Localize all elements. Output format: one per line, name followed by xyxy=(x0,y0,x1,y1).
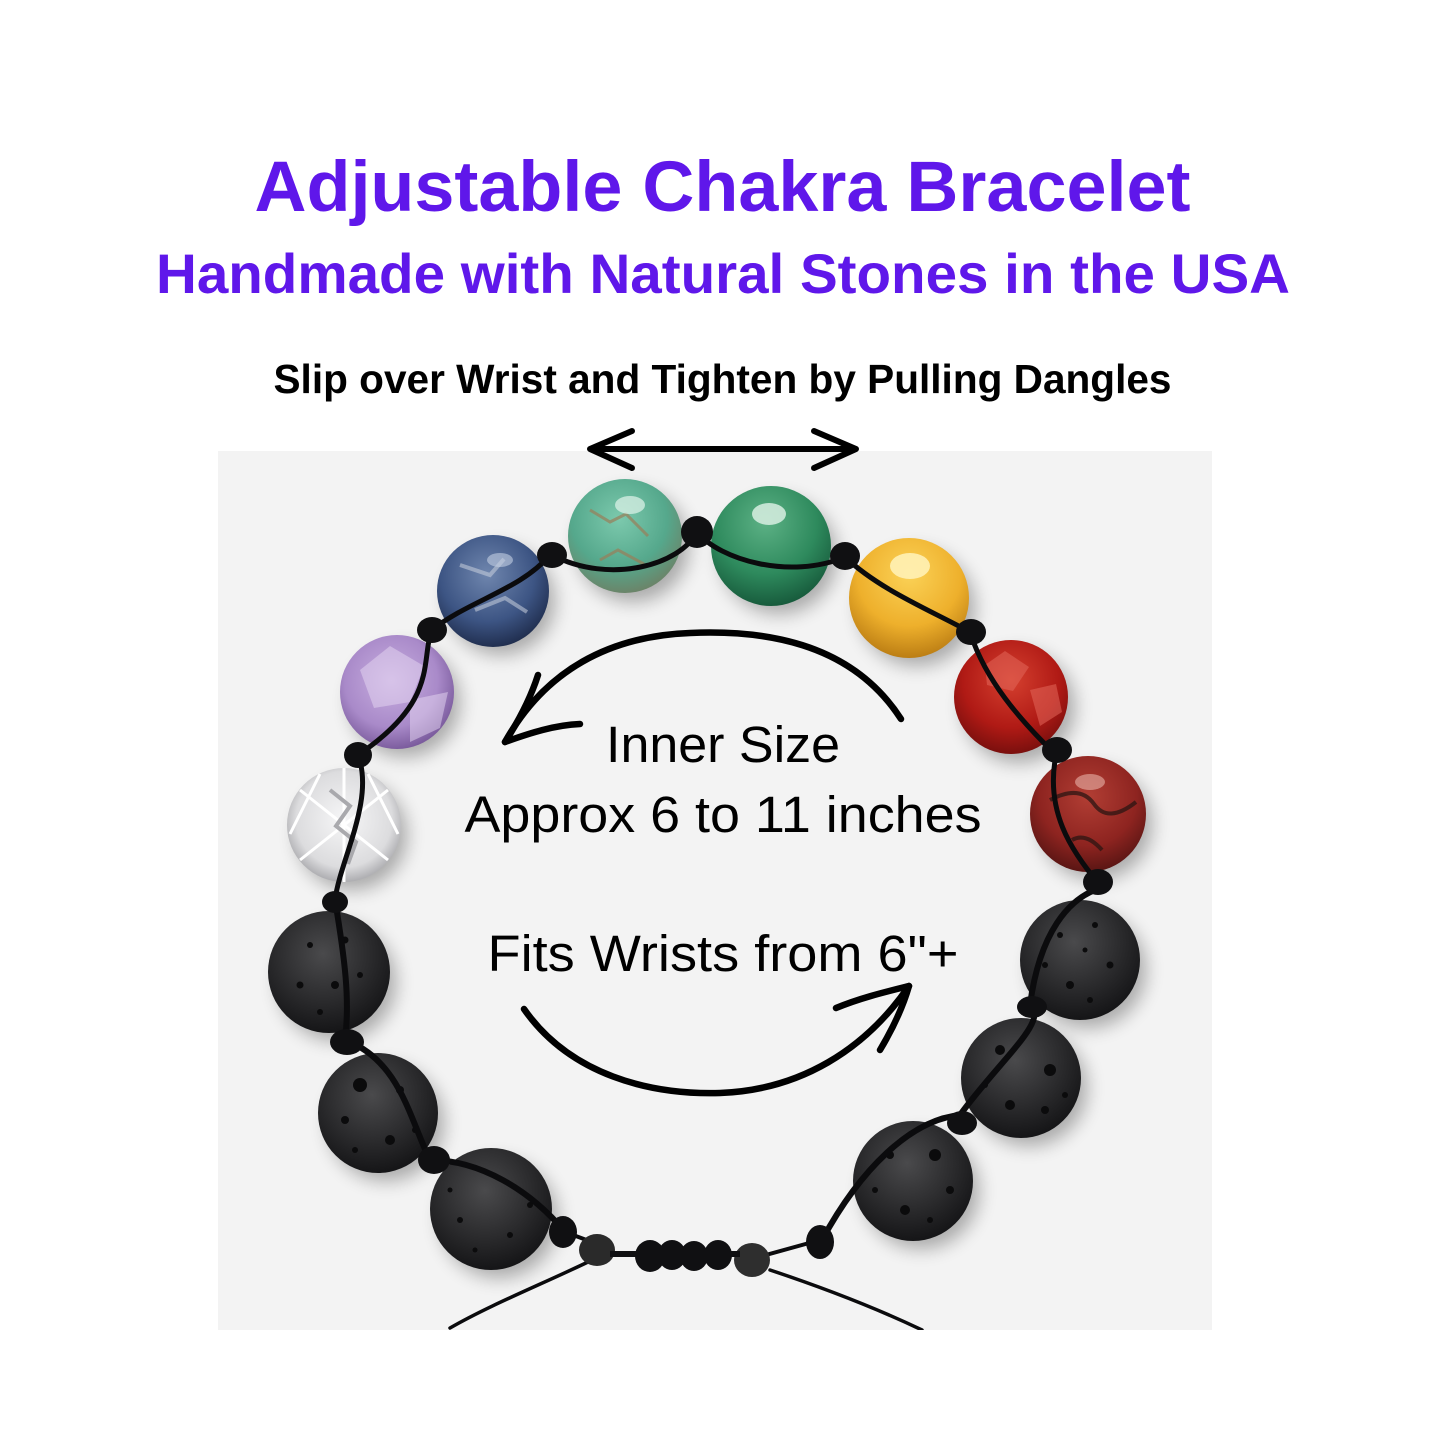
stone: lapis xyxy=(437,535,549,647)
bracelet photo illustration xyxy=(268,479,1152,1330)
photo panel xyxy=(218,451,1212,1330)
title: Adjustable Chakra Bracelet xyxy=(254,148,1190,227)
bead shadows xyxy=(278,490,1152,1278)
stone: red jasper xyxy=(1030,756,1146,872)
stone: green aventurine xyxy=(711,486,831,606)
label: wrist fit: Fits Wrists from 6"+ xyxy=(488,925,958,982)
cord and knots xyxy=(335,532,1100,1330)
knots xyxy=(322,516,1113,1277)
icon: curved arrow pointing left (top) xyxy=(505,633,901,742)
stone: yellow jade xyxy=(849,538,969,658)
label: size range: Approx 6 to 11 inches xyxy=(464,786,982,843)
lava stones xyxy=(268,900,1140,1270)
stone: turquoise xyxy=(568,479,682,593)
icon: curved arrow pointing right (bottom) xyxy=(524,986,909,1093)
label: inner size: Inner Size xyxy=(606,716,840,773)
stone: clear quartz xyxy=(287,768,401,882)
stone: carnelian xyxy=(954,640,1068,754)
subtitle: Handmade with Natural Stones in the USA xyxy=(156,242,1290,305)
stone: amethyst xyxy=(340,635,454,749)
icon: double-headed arrow xyxy=(590,431,856,468)
instruction text: Slip over Wrist and Tighten by Pulling Dangles xyxy=(274,356,1172,402)
